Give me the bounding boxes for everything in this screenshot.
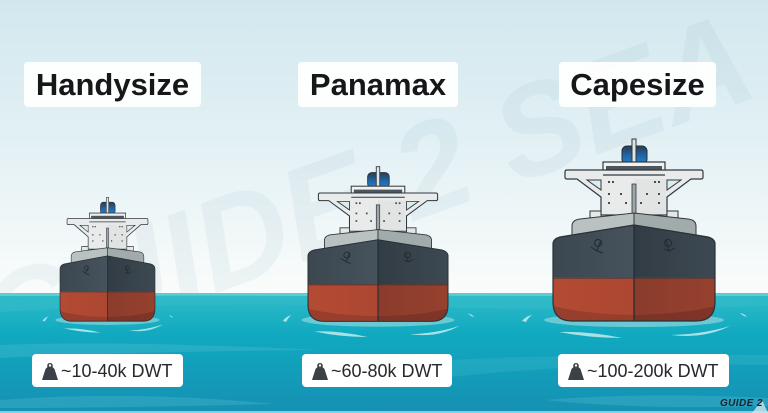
logo text: GUIDE 2 [720, 398, 763, 409]
label: Capesize tonnage [558, 354, 729, 387]
label: Panamax tonnage: ~60-80k DWT [331, 361, 443, 381]
title: Panamax: Panamax [310, 67, 446, 102]
ship: Handysize [60, 197, 155, 321]
wake: Capesize [522, 313, 747, 338]
label: Handysize tonnage: ~10-40k DWT [61, 361, 173, 381]
title: Capesize: Capesize [570, 67, 705, 102]
label: Handysize tonnage [32, 354, 183, 387]
title: Capesize [559, 62, 716, 107]
sky background [0, 0, 768, 294]
title: Handysize [24, 62, 201, 107]
label: Panamax tonnage [302, 354, 452, 387]
wake: Panamax [283, 313, 474, 337]
wake: Handysize [43, 315, 173, 333]
ship: Panamax [308, 167, 448, 321]
title: Panamax [298, 62, 458, 107]
ship: Capesize [553, 139, 715, 321]
corner mark [752, 400, 768, 413]
label: Capesize tonnage: ~100-200k DWT [587, 361, 719, 381]
sea [0, 293, 768, 413]
title: Handysize: Handysize [36, 67, 189, 102]
